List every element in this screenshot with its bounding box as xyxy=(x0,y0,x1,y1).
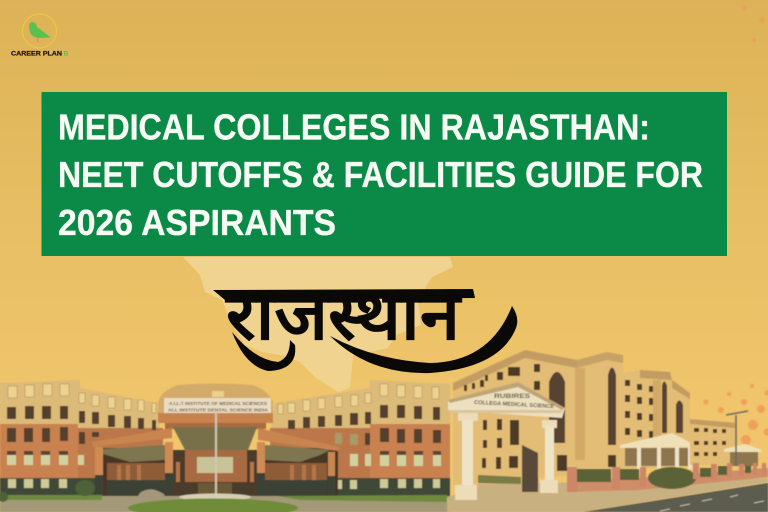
calligraphy word: राजस्थान xyxy=(224,278,462,354)
entrance arch xyxy=(448,382,565,500)
grass strips xyxy=(7,495,102,500)
decorative orange dots xyxy=(704,6,768,445)
fourth-row windows xyxy=(7,454,441,466)
building sign xyxy=(164,398,271,414)
entrance arch: COLLEGA MEDICAL SCIENCE xyxy=(474,400,554,410)
left porch xyxy=(92,428,173,496)
title line 2: NEET CUTOFFS & FACILITIES GUIDE FOR xyxy=(58,154,703,195)
sign band xyxy=(158,413,273,423)
logo ring xyxy=(22,14,56,48)
road markings xyxy=(660,495,764,511)
swoosh xyxy=(330,306,517,373)
hedges xyxy=(577,466,751,489)
olive windows xyxy=(335,433,358,445)
logo text: B: B xyxy=(64,50,68,58)
headline stroke xyxy=(213,289,475,300)
ground xyxy=(447,478,768,512)
light upper windows xyxy=(8,384,439,414)
plaza and road xyxy=(0,496,450,512)
building sign: ALL INSTITUTE DENTAL SCIENCE INDIA xyxy=(168,408,269,414)
left wing upper xyxy=(0,380,80,426)
arched windows xyxy=(549,372,565,443)
title line 1: MEDICAL COLLEGES IN RAJASTHAN: xyxy=(58,106,650,148)
side windows xyxy=(464,364,653,471)
building sign: A.I.L.T INSTITUTE OF MEDICAL SCIENCES xyxy=(169,401,268,407)
logo text: CAREER PLAN xyxy=(11,50,62,58)
right wing lower xyxy=(370,424,450,480)
title banner xyxy=(42,92,727,256)
flag pole xyxy=(215,412,217,496)
Rajasthan calligraphy xyxy=(213,278,517,373)
shaded recesses xyxy=(575,368,585,460)
icon: green bird xyxy=(29,22,51,42)
left column xyxy=(458,413,478,421)
main block xyxy=(453,350,690,485)
central porch xyxy=(173,427,258,496)
wall pillars xyxy=(567,463,766,492)
lawn behind gate xyxy=(478,475,521,484)
right wing upper xyxy=(370,380,450,426)
left wing lower xyxy=(0,424,78,480)
banner panel xyxy=(42,92,727,256)
fountain base xyxy=(179,494,251,500)
central lawn xyxy=(128,498,298,512)
distant portico xyxy=(724,444,762,452)
central dome block xyxy=(158,384,273,415)
shrub xyxy=(75,480,95,496)
title line 3: 2026 ASPIRANTS xyxy=(58,202,336,243)
distant block xyxy=(690,420,736,465)
road xyxy=(583,483,768,512)
right college building xyxy=(447,350,768,512)
parked car xyxy=(138,489,165,498)
dark windows xyxy=(7,405,441,445)
right column xyxy=(542,420,557,428)
street lamp xyxy=(726,411,748,466)
left swash xyxy=(232,332,295,371)
map of Rajasthan xyxy=(183,257,453,392)
left college building xyxy=(0,380,450,512)
iron gate xyxy=(522,445,538,492)
right porch xyxy=(257,428,339,496)
boundary wall xyxy=(567,468,768,492)
small portico xyxy=(620,433,695,448)
logo: Career Plan B xyxy=(11,14,68,58)
entrance arch: RUBIRES xyxy=(494,393,531,400)
dark base xyxy=(0,478,450,496)
